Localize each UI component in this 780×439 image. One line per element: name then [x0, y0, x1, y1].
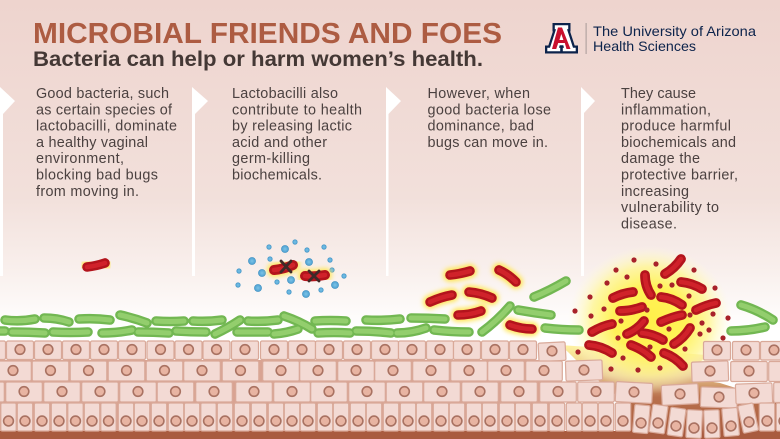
text block 4: disease. [621, 216, 677, 232]
text block 1: lactobacilli, dominate [36, 119, 177, 135]
logo text: The University of Arizona [593, 23, 756, 39]
arrow divider 1 [0, 87, 15, 276]
text block 1: blocking bad bugs [36, 168, 158, 184]
text block 2: contribute to health [232, 102, 362, 118]
text block 4: protective barrier, [621, 168, 738, 184]
text block 3: dominance, bad [428, 119, 534, 135]
text block 1: as certain species of [36, 102, 173, 118]
logo text: Health Sciences [593, 38, 696, 54]
lactic acid: blue dots [235, 239, 347, 298]
inflammation glow [568, 246, 732, 394]
arrow divider 3 [386, 87, 401, 276]
bad bacterium: panel 1 [87, 263, 105, 267]
text block 1: Good bacteria, such [36, 86, 169, 102]
tissue cell row 3 [0, 382, 780, 408]
text block 4: They cause [621, 86, 696, 102]
tissue cell row 4 [1, 403, 780, 438]
logo text [593, 23, 756, 54]
text block 2: acid and other [232, 135, 327, 151]
divider [586, 23, 587, 54]
killed bad bacteria: panel 2 [274, 261, 325, 281]
base layer [0, 431, 780, 439]
bad bacteria moving in: panel 3 [430, 270, 532, 329]
arrow divider 2 [192, 87, 208, 276]
x mark right [309, 271, 319, 281]
text block 2: germ-killing [232, 151, 310, 167]
bad bacteria cluster: panel 4 [589, 259, 716, 366]
text block 2: by releasing lactic [232, 119, 352, 135]
icon: block A [548, 26, 575, 50]
x mark left [281, 261, 291, 272]
text block 4: biochemicals and [621, 135, 736, 151]
text block 4: inflammation, [621, 102, 711, 118]
text block 3: good bacteria lose [428, 102, 551, 118]
good bacteria: green rods [0, 281, 773, 334]
tissue breach: exposed layer [560, 345, 780, 432]
tissue cell row 2 [0, 360, 780, 382]
text block 2: Lactobacilli also [232, 86, 338, 102]
text block 1: a healthy vaginal [36, 135, 148, 151]
text block 1: from moving in. [36, 184, 139, 200]
arrow divider 4 [581, 87, 595, 276]
text block 4: produce harmful [621, 119, 731, 135]
text block 4: increasing [621, 184, 689, 200]
text block 1: environment, [36, 151, 124, 167]
text block 4: vulnerability to [621, 200, 719, 216]
harmful biochemicals: red dots [572, 257, 731, 373]
text block 3: However, when [428, 86, 530, 102]
text block 4: damage the [621, 151, 700, 167]
text block 3: bugs can move in. [428, 135, 548, 151]
tissue cell row 1 [0, 341, 780, 362]
logo: University of Arizona Health Sciences [548, 23, 756, 54]
text block 2: biochemicals. [232, 168, 322, 184]
subtitle: Bacteria can help or harm women’s health. [33, 47, 483, 71]
tissue: gaps between cells [0, 360, 562, 431]
title: MICROBIAL FRIENDS AND FOES [33, 18, 502, 50]
